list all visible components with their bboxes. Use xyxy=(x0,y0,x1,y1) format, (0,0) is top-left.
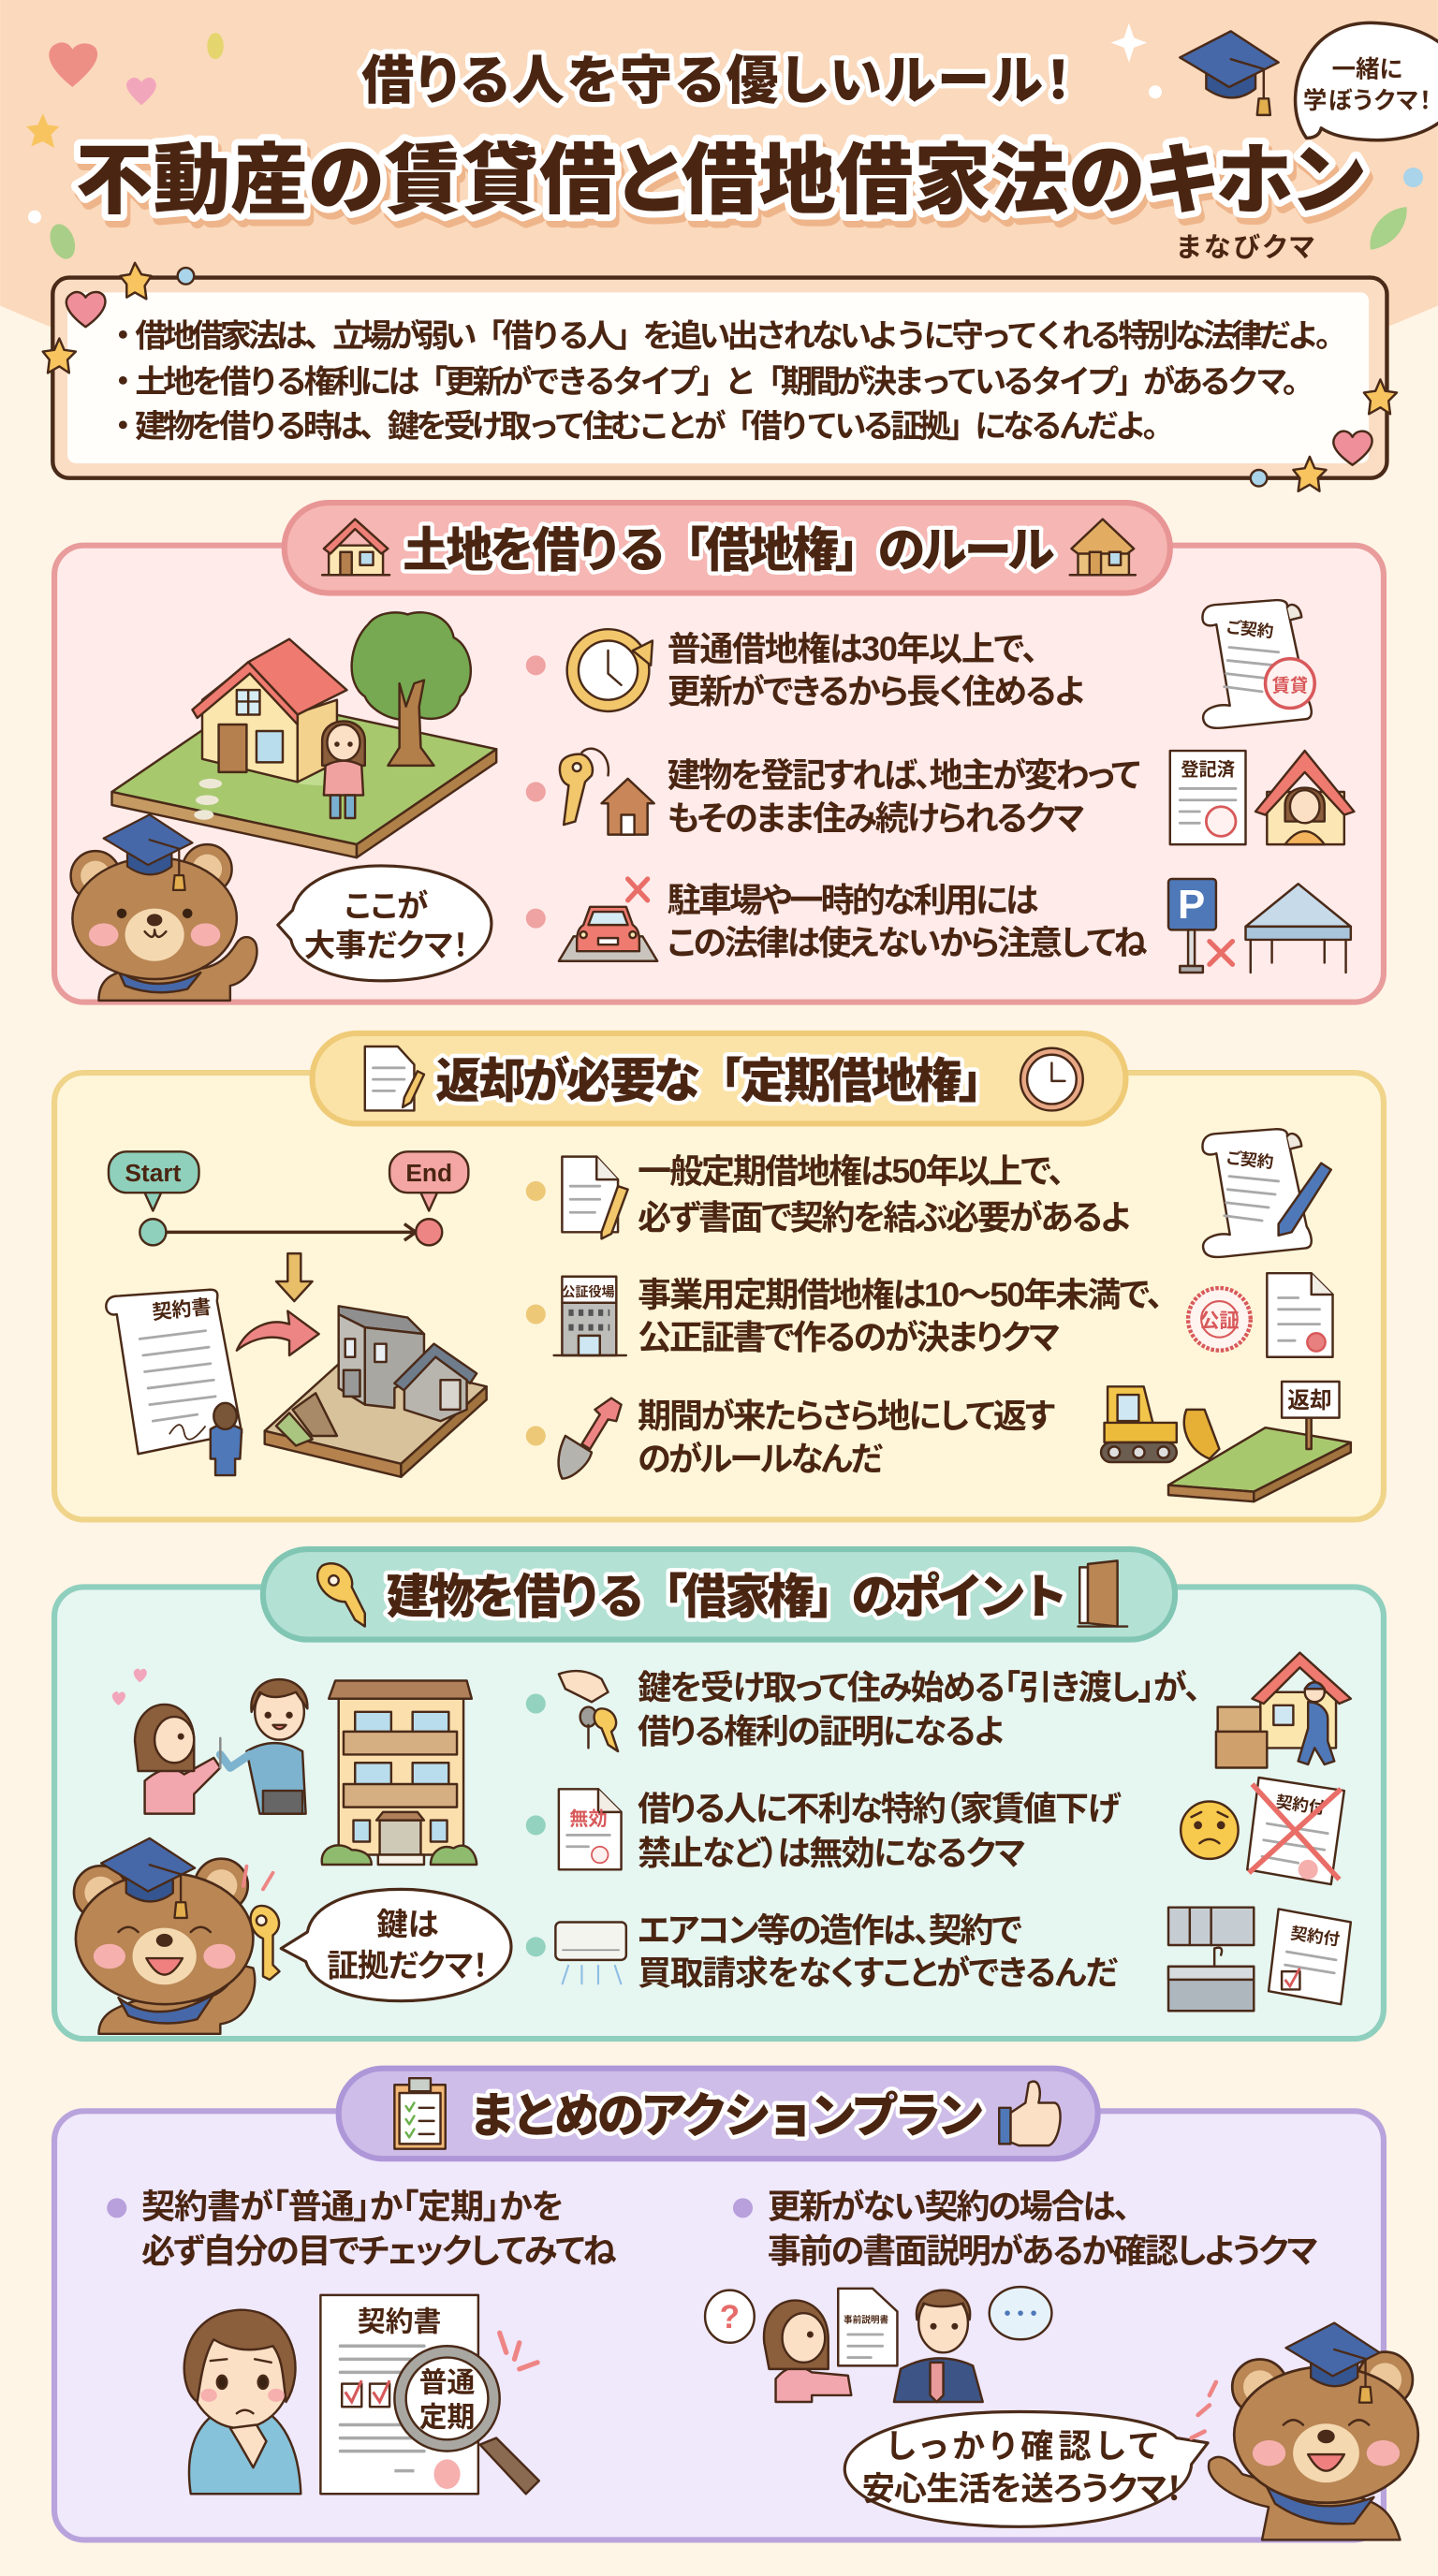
title: subtitle line: 借りる人を守る優しいルール！ xyxy=(361,51,1071,110)
illustration: contract with magnifier: 定期 xyxy=(419,2402,475,2433)
speech bubble: check and live safely: しっかり確認して xyxy=(887,2429,1158,2466)
title block xyxy=(76,51,1364,263)
bullet row: registration: もそのまま住み続けられるクマ xyxy=(668,798,1085,837)
bear mascot: cheering xyxy=(1192,2323,1418,2539)
panel: fixed-term land lease xyxy=(54,1033,1384,1519)
icon: shovel xyxy=(559,1398,622,1479)
bullet row: parking excluded: 駐車場や一時的な利用には xyxy=(668,881,1038,919)
icon: tan house xyxy=(1070,520,1136,575)
icon: parking sign xyxy=(1168,879,1232,973)
bullet row: renewal: 普通借地権は30年以上で、 xyxy=(668,630,1038,668)
illustration: bulldozer on returned lot xyxy=(1101,1382,1351,1501)
bullet row: parking excluded xyxy=(526,879,1351,973)
bullet row: handover xyxy=(526,1653,1351,1767)
icon: thumbs up xyxy=(999,2082,1061,2145)
timeline: start to end xyxy=(109,1151,468,1245)
bullet row: registration: 建物を登記すれば、地主が変わって xyxy=(668,756,1140,795)
icon: document and pencil xyxy=(365,1046,424,1110)
icon: clock with arrow xyxy=(567,629,653,711)
bullet row: general fixed-term: 必ず書面で契約を結ぶ必要があるよ xyxy=(638,1198,1131,1237)
icon: gold key xyxy=(317,1563,365,1627)
icon: red seal xyxy=(1188,1288,1251,1351)
panel: action plan xyxy=(54,2069,1418,2539)
icon: woman in house xyxy=(1255,751,1354,844)
bullet row: business fixed-term xyxy=(526,1273,1333,1357)
heading pill: building lease: 建物を借りる「借家権」のポイント xyxy=(387,1571,1068,1624)
decorations: hearts, stars, sparkle, leaves xyxy=(26,23,1423,262)
bullet row: handover: 借りる権利の証明になるよ xyxy=(638,1712,1005,1750)
illustration: boy thinking xyxy=(184,2310,301,2494)
speech bubble: important: 大事だクマ！ xyxy=(304,929,468,963)
title: main line: 不動産の賃貸借と借地借家法のキホン xyxy=(76,138,1364,224)
bullet row: return as vacant land: 期間が来たらさら地にして返す xyxy=(638,1397,1055,1435)
panel: intro summary: ・土地を借りる権利には「更新ができるタイプ」と「期間が決まっているタイプ」があるクマ。 xyxy=(107,363,1314,400)
bullet row: fixtures: エアコン等の造作は、契約で xyxy=(638,1911,1022,1950)
panel: intro summary: ・建物を借りる時は、鍵を受け取って住むことが「借りている証拠」になるんだよ。 xyxy=(107,408,1175,445)
bullet row: renewal xyxy=(526,596,1314,730)
bullet: confirm written explanation: 事前の書面説明があるか確認しようクマ xyxy=(768,2232,1318,2270)
bullet: check contract type: 契約書が「普通」か「定期」かを xyxy=(141,2187,564,2225)
author name: まなびクマ xyxy=(1177,233,1314,263)
bullet row: renewal: 更新ができるから長く住めるよ xyxy=(668,672,1085,710)
icon: question bubble: ? xyxy=(720,2299,740,2335)
icon: crossed contract xyxy=(1247,1778,1344,1884)
bullet row: registration xyxy=(526,749,1354,844)
illustration: contract with magnifier: 普通 xyxy=(419,2367,476,2398)
bullet row: business fixed-term: 事業用定期借地権は10～50年未満で、 xyxy=(638,1275,1164,1313)
icon: registered document: 登記済 xyxy=(1181,759,1235,780)
timeline: start to end: Start xyxy=(125,1159,182,1187)
illustration: contract with magnifier: 契約書 xyxy=(358,2306,441,2337)
icon: contract scroll with stamp: ご契約 xyxy=(1225,618,1274,641)
bullet: confirm written explanation xyxy=(733,2187,1318,2270)
arrow: curved red xyxy=(237,1311,319,1355)
speech bubble: key is proof: 証拠だクマ！ xyxy=(327,1949,488,1983)
icon: checklist xyxy=(394,2078,446,2149)
heading pill: fixed-term lease: 返却が必要な「定期借地権」 xyxy=(435,1054,1005,1107)
icon: void document: 無効 xyxy=(569,1808,608,1830)
bullet: check contract type xyxy=(107,2187,617,2270)
icon: parking sign: P xyxy=(1178,882,1205,928)
bullet row: parking excluded: この法律は使えないから注意してね xyxy=(668,924,1148,962)
icon: crossed contract: 契約付 xyxy=(1275,1793,1326,1818)
icon: wall clock xyxy=(1020,1048,1083,1110)
speech bubble: learn together: 一緒に xyxy=(1332,56,1402,82)
bullet: check contract type: 必ず自分の目でチェックしてみてね xyxy=(141,2232,617,2270)
speech bubble: check and live safely xyxy=(844,2411,1208,2526)
heading pill: land lease: 土地を借りる「借地権」のルール xyxy=(403,524,1055,578)
arrow: down xyxy=(276,1253,313,1301)
icon: void document xyxy=(559,1789,622,1869)
bullet row: handover: 鍵を受け取って住み始める「引き渡し」が、 xyxy=(638,1668,1201,1706)
speech bubble: check and live safely: 安心生活を送ろうクマ！ xyxy=(862,2471,1182,2508)
icon: office building xyxy=(554,1277,626,1355)
heading pill: action plan xyxy=(339,2069,1098,2159)
icon: explanation document: 事前説明書 xyxy=(844,2315,889,2326)
illustration: moving in xyxy=(1216,1653,1351,1767)
icon: graduation cap xyxy=(1180,31,1279,115)
bullet row: fixtures: 買取請求をなくすことができるんだ xyxy=(638,1954,1118,1992)
icon: ellipsis bubble xyxy=(990,2287,1051,2339)
panel: intro summary: ・借地借家法は、立場が弱い「借りる人」を追い出されないように守ってくれる特別な法律だよ。 xyxy=(107,317,1347,354)
icon: car and cross xyxy=(559,879,657,961)
illustration: house on dug lot xyxy=(265,1306,487,1477)
speech bubble: important: ここが xyxy=(345,888,428,924)
bullet row: return as vacant land xyxy=(526,1382,1351,1501)
icon: contract scroll with stamp: 賃貸 xyxy=(1272,675,1308,696)
icon: sad face xyxy=(1181,1801,1239,1859)
icon: document with pencil xyxy=(562,1157,628,1238)
icon: air conditioner xyxy=(555,1922,626,1984)
icon: door xyxy=(1078,1560,1127,1627)
bullet: confirm written explanation: 更新がない契約の場合は、 xyxy=(768,2187,1131,2225)
panel: land lease rules xyxy=(54,503,1384,1003)
panel: intro summary xyxy=(52,278,1387,478)
illustration: key handover couple xyxy=(112,1668,307,1814)
heading pill: building lease xyxy=(263,1549,1175,1640)
speech bubble: important xyxy=(278,866,492,981)
decorations: intro frame stars and hearts xyxy=(43,263,1397,491)
icon: contract and pen: ご契約 xyxy=(1225,1149,1274,1172)
bullet row: invalid clauses: 借りる人に不利な特約（家賃値下げ xyxy=(638,1790,1122,1828)
bullet row: fixtures xyxy=(526,1908,1351,2011)
header peach arc xyxy=(0,0,1438,463)
heading pill: action plan: まとめのアクションプラン xyxy=(468,2089,984,2143)
bullet row: general fixed-term: 一般定期借地権は50年以上で、 xyxy=(638,1152,1064,1191)
icon: key and house xyxy=(560,749,654,835)
illustration: contract with signer: 契約書 xyxy=(151,1295,213,1324)
speech bubble: learn together: 学ぼうクマ！ xyxy=(1303,88,1431,114)
icon: tent xyxy=(1246,884,1351,973)
panel: building lease xyxy=(54,1549,1384,2039)
heading pill: land lease xyxy=(285,503,1170,593)
illustration: woman standing xyxy=(322,721,365,818)
bullet row: general fixed-term xyxy=(526,1125,1331,1259)
illustration: contract with magnifier xyxy=(320,2295,539,2494)
bullet row: business fixed-term: 公正証書で作るのが決まりクマ xyxy=(638,1318,1060,1356)
icon: registered document xyxy=(1170,751,1246,844)
bullet row: invalid clauses: 禁止など）は無効になるクマ xyxy=(638,1834,1025,1872)
speech bubble: learn together xyxy=(1296,22,1438,140)
icon: red seal: 公証 xyxy=(1199,1310,1239,1332)
illustration: house and tree on lot xyxy=(111,612,496,857)
bullet row: return as vacant land: のがルールなんだ xyxy=(638,1440,883,1478)
icon: built-in cupboard and kitchen xyxy=(1168,1908,1254,2011)
bear mascot: waving xyxy=(71,814,257,1001)
icon: red house xyxy=(322,520,389,575)
illustration: contract with signer xyxy=(106,1290,242,1475)
bullet row: invalid clauses xyxy=(526,1778,1344,1884)
illustration: bulldozer on returned lot: 返却 xyxy=(1287,1388,1332,1413)
illustration: explanation meeting xyxy=(705,2287,1051,2402)
icon: notarized document xyxy=(1267,1273,1333,1357)
icon: question bubble xyxy=(705,2291,755,2343)
icon: contract scroll with stamp xyxy=(1192,596,1314,730)
speech bubble: key is proof xyxy=(281,1889,511,2001)
icon: signed contract xyxy=(1269,1909,1351,2004)
icon: office building: 公証役場 xyxy=(562,1284,615,1299)
icon: explanation document xyxy=(838,2289,897,2365)
icon: hand with keys xyxy=(559,1671,618,1751)
illustration: apartment building xyxy=(322,1680,477,1865)
bear mascot: holding key xyxy=(74,1838,280,2034)
icon: contract and pen xyxy=(1192,1125,1331,1259)
icon: signed contract: 契約付 xyxy=(1289,1924,1341,1949)
timeline: start to end: End xyxy=(405,1159,452,1187)
speech bubble: key is proof: 鍵は xyxy=(376,1909,439,1943)
heading pill: fixed-term lease xyxy=(313,1033,1125,1123)
